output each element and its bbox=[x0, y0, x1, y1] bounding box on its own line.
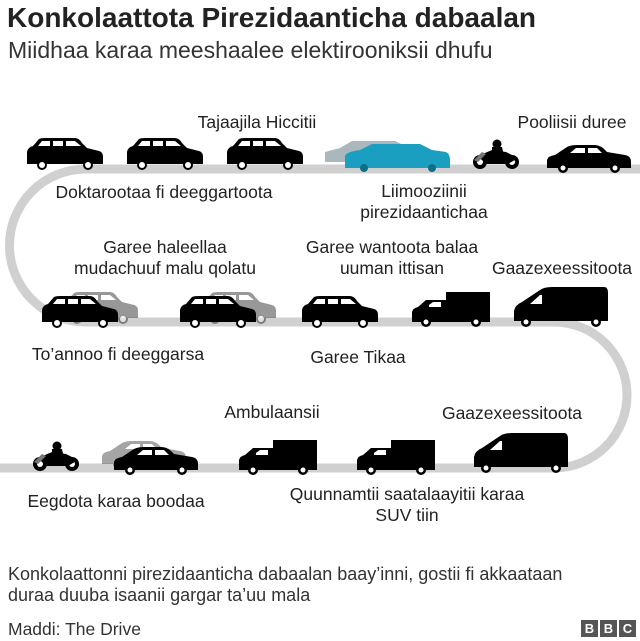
BBC logo: B bbox=[604, 621, 613, 636]
label: Garee wantoota bbox=[306, 237, 478, 278]
footer note: Konkolaattonni pirezidaanticha dabaalan baay’inni, gostii fi akkaataan bbox=[8, 564, 562, 584]
label: Pooliisii duree: Pooliisii duree bbox=[518, 112, 626, 132]
label: Garee haleellaa bbox=[74, 237, 256, 278]
BBC logo: B bbox=[585, 621, 594, 636]
row 1 vehicles bbox=[27, 138, 631, 173]
label: Garee wantoota: uuman ittisan bbox=[340, 258, 444, 278]
subtitle: Miidhaa karaa meeshaalee elektirooniksii dhufu bbox=[8, 37, 493, 63]
label: Garee haleellaa: mudachuuf malu qolatu bbox=[74, 258, 256, 278]
label: Garee Tikaa: Garee Tikaa bbox=[310, 347, 406, 367]
footer note bbox=[8, 564, 562, 605]
motorbike bbox=[473, 140, 519, 169]
label: Garee wantoota: Garee wantoota balaa bbox=[306, 237, 478, 257]
label: Gaazexeessitoota 1: Gaazexeessitoota bbox=[492, 258, 632, 278]
road bbox=[0, 169, 640, 468]
row 2 vehicles bbox=[42, 287, 608, 328]
label: Quunnamtii: SUV tiin bbox=[375, 505, 439, 525]
label: To'annoo: To’annoo fi deeggarsa bbox=[32, 344, 204, 364]
label: Ambulaansii: Ambulaansii bbox=[224, 402, 320, 422]
BBC logo bbox=[581, 620, 636, 637]
label: Liimooziinii: pirezidaantichaa bbox=[360, 202, 488, 222]
label: Liimooziinii: Liimooziinii bbox=[381, 181, 467, 201]
row 3 vehicles bbox=[33, 433, 568, 475]
label: Quunnamtii bbox=[290, 484, 524, 525]
label: Quunnamtii: Quunnamtii saatalaayitii karaa bbox=[290, 484, 524, 504]
label: Liimooziinii bbox=[360, 181, 488, 222]
label: Garee haleellaa: Garee haleellaa bbox=[103, 237, 227, 257]
label: Doktarootaa: Doktarootaa fi deeggartoota bbox=[56, 182, 272, 202]
title: Konkolaattota Pirezidaanticha dabaalan bbox=[7, 2, 536, 33]
label: Eegdota: Eegdota karaa boodaa bbox=[27, 491, 205, 511]
label: Gaazexeessitoota 2: Gaazexeessitoota bbox=[442, 403, 582, 423]
source: Maddi: The Drive bbox=[8, 619, 141, 639]
label: Tajaajila Hiccitii: Tajaajila Hiccitii bbox=[198, 112, 316, 132]
footer note: duraa duuba isaanii gargar ta’uu mala bbox=[8, 585, 310, 605]
limousine bbox=[325, 141, 450, 172]
BBC logo: C bbox=[623, 621, 632, 636]
